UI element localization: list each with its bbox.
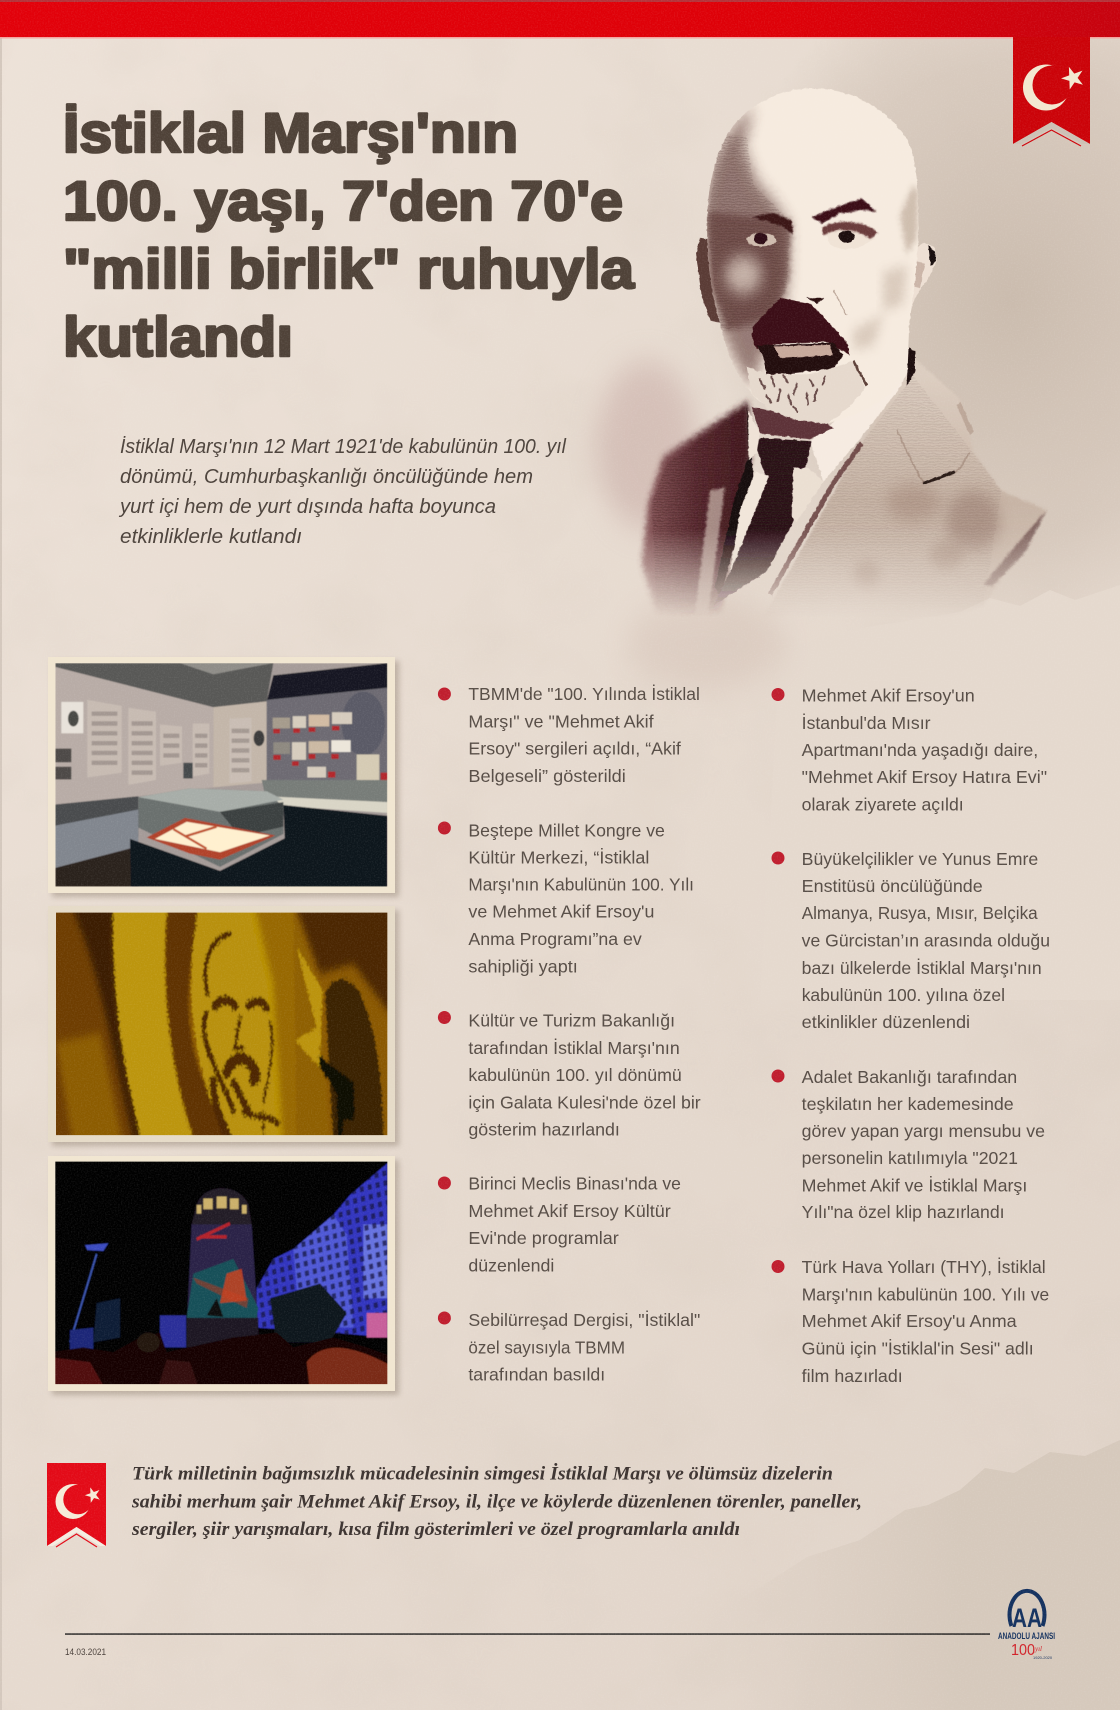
intro text: etkinliklerle kutlandı <box>120 526 302 548</box>
beard <box>747 361 865 424</box>
face lines <box>204 934 278 1141</box>
photo frames <box>47 657 399 1395</box>
text left: kabulünün 100. yıl dönümü <box>468 1065 682 1085</box>
logo: Anadolu Ajansı <box>998 1591 1055 1660</box>
text right: kabulünün 100. yılına özel <box>802 985 1005 1005</box>
text right: Mehmet Akif ve İstiklal Marşı <box>802 1176 1027 1196</box>
closing statement: sahibi merhum şair Mehmet Akif Ersoy, il, ilçe ve köylerde düzenlenen törenler, paneller, <box>131 1492 862 1512</box>
text left: Kültür Merkezi, “İstiklal <box>468 848 649 868</box>
text right: görev yapan yargı mensubu ve <box>802 1121 1045 1141</box>
text left: Marşı" ve "Mehmet Akif <box>468 712 654 732</box>
title: kutlandı <box>63 305 293 368</box>
glass case <box>138 788 283 867</box>
intro text: yurt içi hem de yurt dışında hafta boyunca <box>118 496 496 518</box>
icon: crescent and star <box>1023 63 1087 110</box>
logo: Anadolu Ajansı: AA <box>1012 1603 1042 1633</box>
text left: gösterim hazırlandı <box>468 1120 620 1140</box>
silhouette <box>325 979 383 1146</box>
photo: exhibition room <box>55 663 387 887</box>
title: İstiklal Marşı'nın <box>63 101 518 164</box>
title: "milli birlik" ruhuyla <box>63 237 635 300</box>
text right: Apartmanı'nda yaşadığı daire, <box>802 740 1038 760</box>
footer rule <box>65 1633 990 1635</box>
text right: "Mehmet Akif Ersoy Hatıra Evi" <box>802 767 1047 787</box>
text left: sahipliği yaptı <box>468 956 578 976</box>
text panels <box>87 700 122 778</box>
text left: Kültür ve Turizm Bakanlığı <box>468 1010 675 1030</box>
intro text: İstiklal Marşı'nın 12 Mart 1921'de kabulünün 100. yıl <box>120 436 567 458</box>
crowd <box>50 1333 393 1392</box>
text right: Yılı"na özel klip hazırlandı <box>802 1202 1005 1222</box>
intro text <box>118 436 567 548</box>
closing statement <box>131 1462 862 1540</box>
face shading <box>703 108 918 388</box>
text left: Marşı'nın Kabulünün 100. Yılı <box>468 874 694 894</box>
text left: için Galata Kulesi'nde özel bir <box>468 1092 701 1112</box>
text left: Ersoy" sergileri açıldı, “Akif <box>468 738 681 758</box>
text left: özel sayısıyla TBMM <box>468 1338 625 1358</box>
bottom flag <box>47 1463 106 1547</box>
eyes <box>747 233 776 247</box>
text right: Türk Hava Yolları (THY), İstiklal <box>802 1257 1046 1277</box>
shirt strips <box>748 411 760 460</box>
text left: Mehmet Akif Ersoy Kültür <box>468 1201 671 1221</box>
nose shadow <box>807 298 824 303</box>
photo: Galata Tower at night <box>50 1156 393 1392</box>
intro text: dönümü, Cumhurbaşkanlığı öncülüğünde hem <box>120 466 533 488</box>
white collar right <box>810 361 913 481</box>
text right: İstanbul'da Mısır <box>802 713 931 733</box>
jacket right <box>780 360 1046 592</box>
text right: olarak ziyarete açıldı <box>802 794 964 814</box>
title <box>63 101 635 368</box>
lip <box>774 345 833 358</box>
text left: TBMM'de "100. Yılında İstiklal <box>468 684 700 704</box>
text left: tarafından basıldı <box>468 1364 605 1384</box>
text right: Adalet Bakanlığı tarafından <box>802 1067 1017 1087</box>
text right: Mehmet Akif Ersoy'u Anma <box>802 1311 1017 1331</box>
text right: Günü için "İstiklal'in Sesi" adlı <box>802 1338 1034 1358</box>
text right: Almanya, Rusya, Mısır, Belçika <box>802 903 1038 923</box>
ears <box>696 238 720 323</box>
bullet list right <box>772 686 1050 1386</box>
text right: film hazırladı <box>802 1366 903 1386</box>
logo: Anadolu Ajansı: yıl <box>1034 1645 1042 1653</box>
text right: Büyükelçilikler ve Yunus Emre <box>802 849 1038 869</box>
pole <box>70 1254 97 1342</box>
text right: etkinlikler düzenlendi <box>802 1012 970 1032</box>
black lapel <box>715 403 753 598</box>
head <box>707 88 918 424</box>
text right: bazı ülkelerde İstiklal Marşı'nın <box>802 958 1042 978</box>
star point <box>295 947 323 1067</box>
logo: Anadolu Ajansı: ANADOLU AJANSI <box>998 1631 1055 1642</box>
logo: Anadolu Ajansı: 1920-2020 <box>1033 1655 1053 1660</box>
lapel dark edge <box>770 443 862 594</box>
text left <box>468 684 701 1384</box>
text right: teşkilatın her kademesinde <box>802 1094 1014 1114</box>
closing statement: sergiler, şiir yarışmaları, kısa film gösterimleri ve özel programlarla anıldı <box>131 1519 740 1540</box>
frame shadows and mats <box>48 657 399 1395</box>
logo: Anadolu Ajansı: 100 <box>1011 1642 1035 1659</box>
text right: Marşı'nın kabulünün 100. Yılı ve <box>802 1284 1049 1304</box>
text right <box>802 686 1050 1386</box>
portrait of Mehmet Akif Ersoy <box>597 88 1047 690</box>
buildings <box>257 1163 387 1338</box>
date: 14.03.2021 <box>65 1647 106 1658</box>
text left: Evi'nde programlar <box>468 1228 619 1248</box>
text left: Belgeseli” gösterildi <box>468 766 626 786</box>
ribbon flag top right <box>1013 37 1090 146</box>
top red band <box>0 0 1120 38</box>
neck shadow <box>752 407 833 439</box>
bullets left <box>438 688 451 1324</box>
text right: Mehmet Akif Ersoy'un <box>802 686 975 706</box>
text left: Birinci Meclis Binası'nda ve <box>468 1174 681 1194</box>
tower <box>187 1225 258 1328</box>
text right: personelin katılımıyla "2021 <box>802 1148 1018 1168</box>
rose smear behind portrait <box>597 361 697 529</box>
text left: Anma Programı”na ev <box>468 929 642 949</box>
text left: düzenlendi <box>468 1256 554 1276</box>
display case base <box>130 836 288 887</box>
bullets right <box>772 688 784 1273</box>
open book <box>147 818 275 860</box>
text left: ve Mehmet Akif Ersoy'u <box>468 902 654 922</box>
text left: tarafından İstiklal Marşı'nın <box>468 1038 680 1058</box>
text left: Sebilürreşad Dergisi, "İstiklal" <box>468 1310 700 1330</box>
wall posters <box>273 712 379 780</box>
photo: sand art portrait <box>56 912 388 1136</box>
closing statement: Türk milletinin bağımsızlık mücadelesinin simgesi İstiklal Marşı ve ölümsüz dizelerin <box>132 1462 833 1484</box>
bullet list left <box>438 684 701 1384</box>
tie <box>713 437 812 606</box>
text right: Enstitüsü öncülüğünde <box>802 876 983 896</box>
lower walls and floor <box>55 796 139 826</box>
text right: ve Gürcistan’ın arasında olduğu <box>802 930 1050 950</box>
dark coat left <box>642 401 752 617</box>
text left: Beştepe Millet Kongre ve <box>468 820 665 840</box>
moustache <box>752 298 850 355</box>
coat group <box>642 357 1047 636</box>
brows <box>752 212 793 235</box>
title: 100. yaşı, 7'den 70'e <box>63 169 623 232</box>
